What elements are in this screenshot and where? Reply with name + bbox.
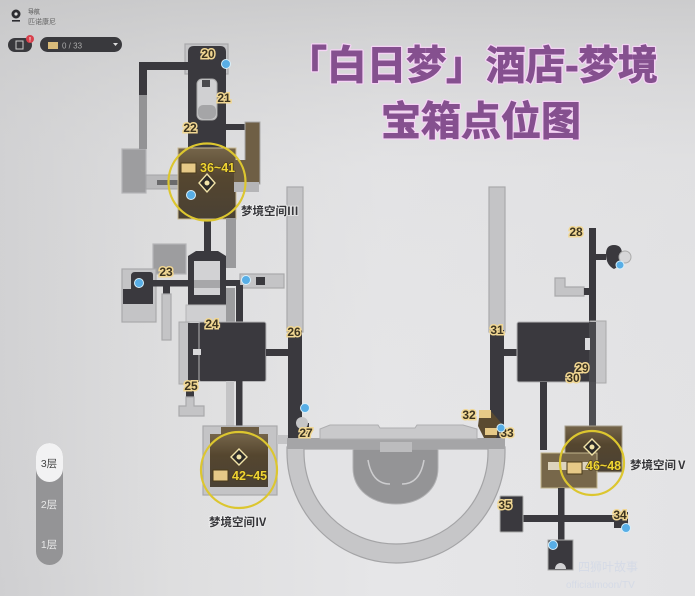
chest number labels: 23 [159, 265, 173, 279]
chest number labels: 27 [299, 426, 313, 440]
floor selector: 2层 [41, 499, 57, 511]
chest range callouts [181, 161, 621, 483]
title: 宝箱点位图 [381, 100, 581, 144]
chest number labels: 24 [205, 317, 219, 331]
dream space labels: 梦境空间Ⅲ [241, 204, 298, 218]
hud: quest button [8, 35, 34, 52]
map: central hall and west rooms [122, 244, 289, 426]
map: east wing, dream space V [500, 228, 631, 570]
chest range callouts: 36~41 [200, 161, 235, 175]
chest number labels: 33 [500, 426, 514, 440]
watermark: 四狮叶故事 [578, 559, 638, 574]
chest number labels: 26 [287, 325, 301, 339]
watermark [566, 559, 638, 591]
dream space diamond icons [199, 174, 600, 465]
map: west and east long corridors [287, 187, 518, 440]
chest number labels: 21 [217, 91, 231, 105]
chest number labels: 32 [462, 408, 476, 422]
chest range callouts: 42~45 [232, 469, 267, 483]
chest number labels: 29 [575, 361, 589, 375]
title: 宝箱点位图 [381, 100, 581, 144]
floor selector: 3层 [41, 458, 57, 470]
title: 「白日梦」酒店-梦境 [287, 44, 658, 88]
chest number labels: 22 [183, 121, 197, 135]
hud: navigation location: 匹诺康尼 [28, 17, 56, 26]
map: semicircular gallery and courtyard [287, 417, 505, 563]
chest number labels: 30 [566, 371, 580, 385]
chest number labels [159, 47, 627, 522]
floor selector: 1层 [41, 539, 57, 551]
chest number labels: 28 [569, 225, 583, 239]
chest number labels: 35 [498, 498, 512, 512]
dream space labels: 梦境空间Ⅴ [630, 458, 688, 472]
title [287, 44, 658, 144]
chest number labels: 34 [613, 508, 627, 522]
map: dream space IV room [203, 426, 289, 495]
teleport icons [134, 60, 630, 550]
marker circles around dream spaces [168, 144, 624, 508]
chest number labels: 20 [201, 47, 215, 61]
hud: navigation location: 导航 [28, 8, 40, 16]
hud: quest button: ! [29, 38, 31, 44]
hud: chest counter [40, 37, 122, 52]
dream space labels [209, 204, 688, 529]
hud: chest counter: 0 / 33 [62, 42, 83, 50]
map: upper-left wing, dream space III [122, 44, 260, 268]
floor selector [36, 443, 63, 565]
chest cluster near 32 [478, 410, 502, 438]
dream space labels: 梦境空间Ⅳ [209, 515, 267, 529]
title: 「白日梦」酒店-梦境 [287, 44, 658, 88]
watermark: officialmoon/TV [566, 580, 635, 591]
chest number labels: 25 [184, 379, 198, 393]
chest range callouts: 46~48 [586, 459, 621, 473]
chest number labels: 31 [490, 323, 504, 337]
hud: navigation location [12, 8, 56, 26]
